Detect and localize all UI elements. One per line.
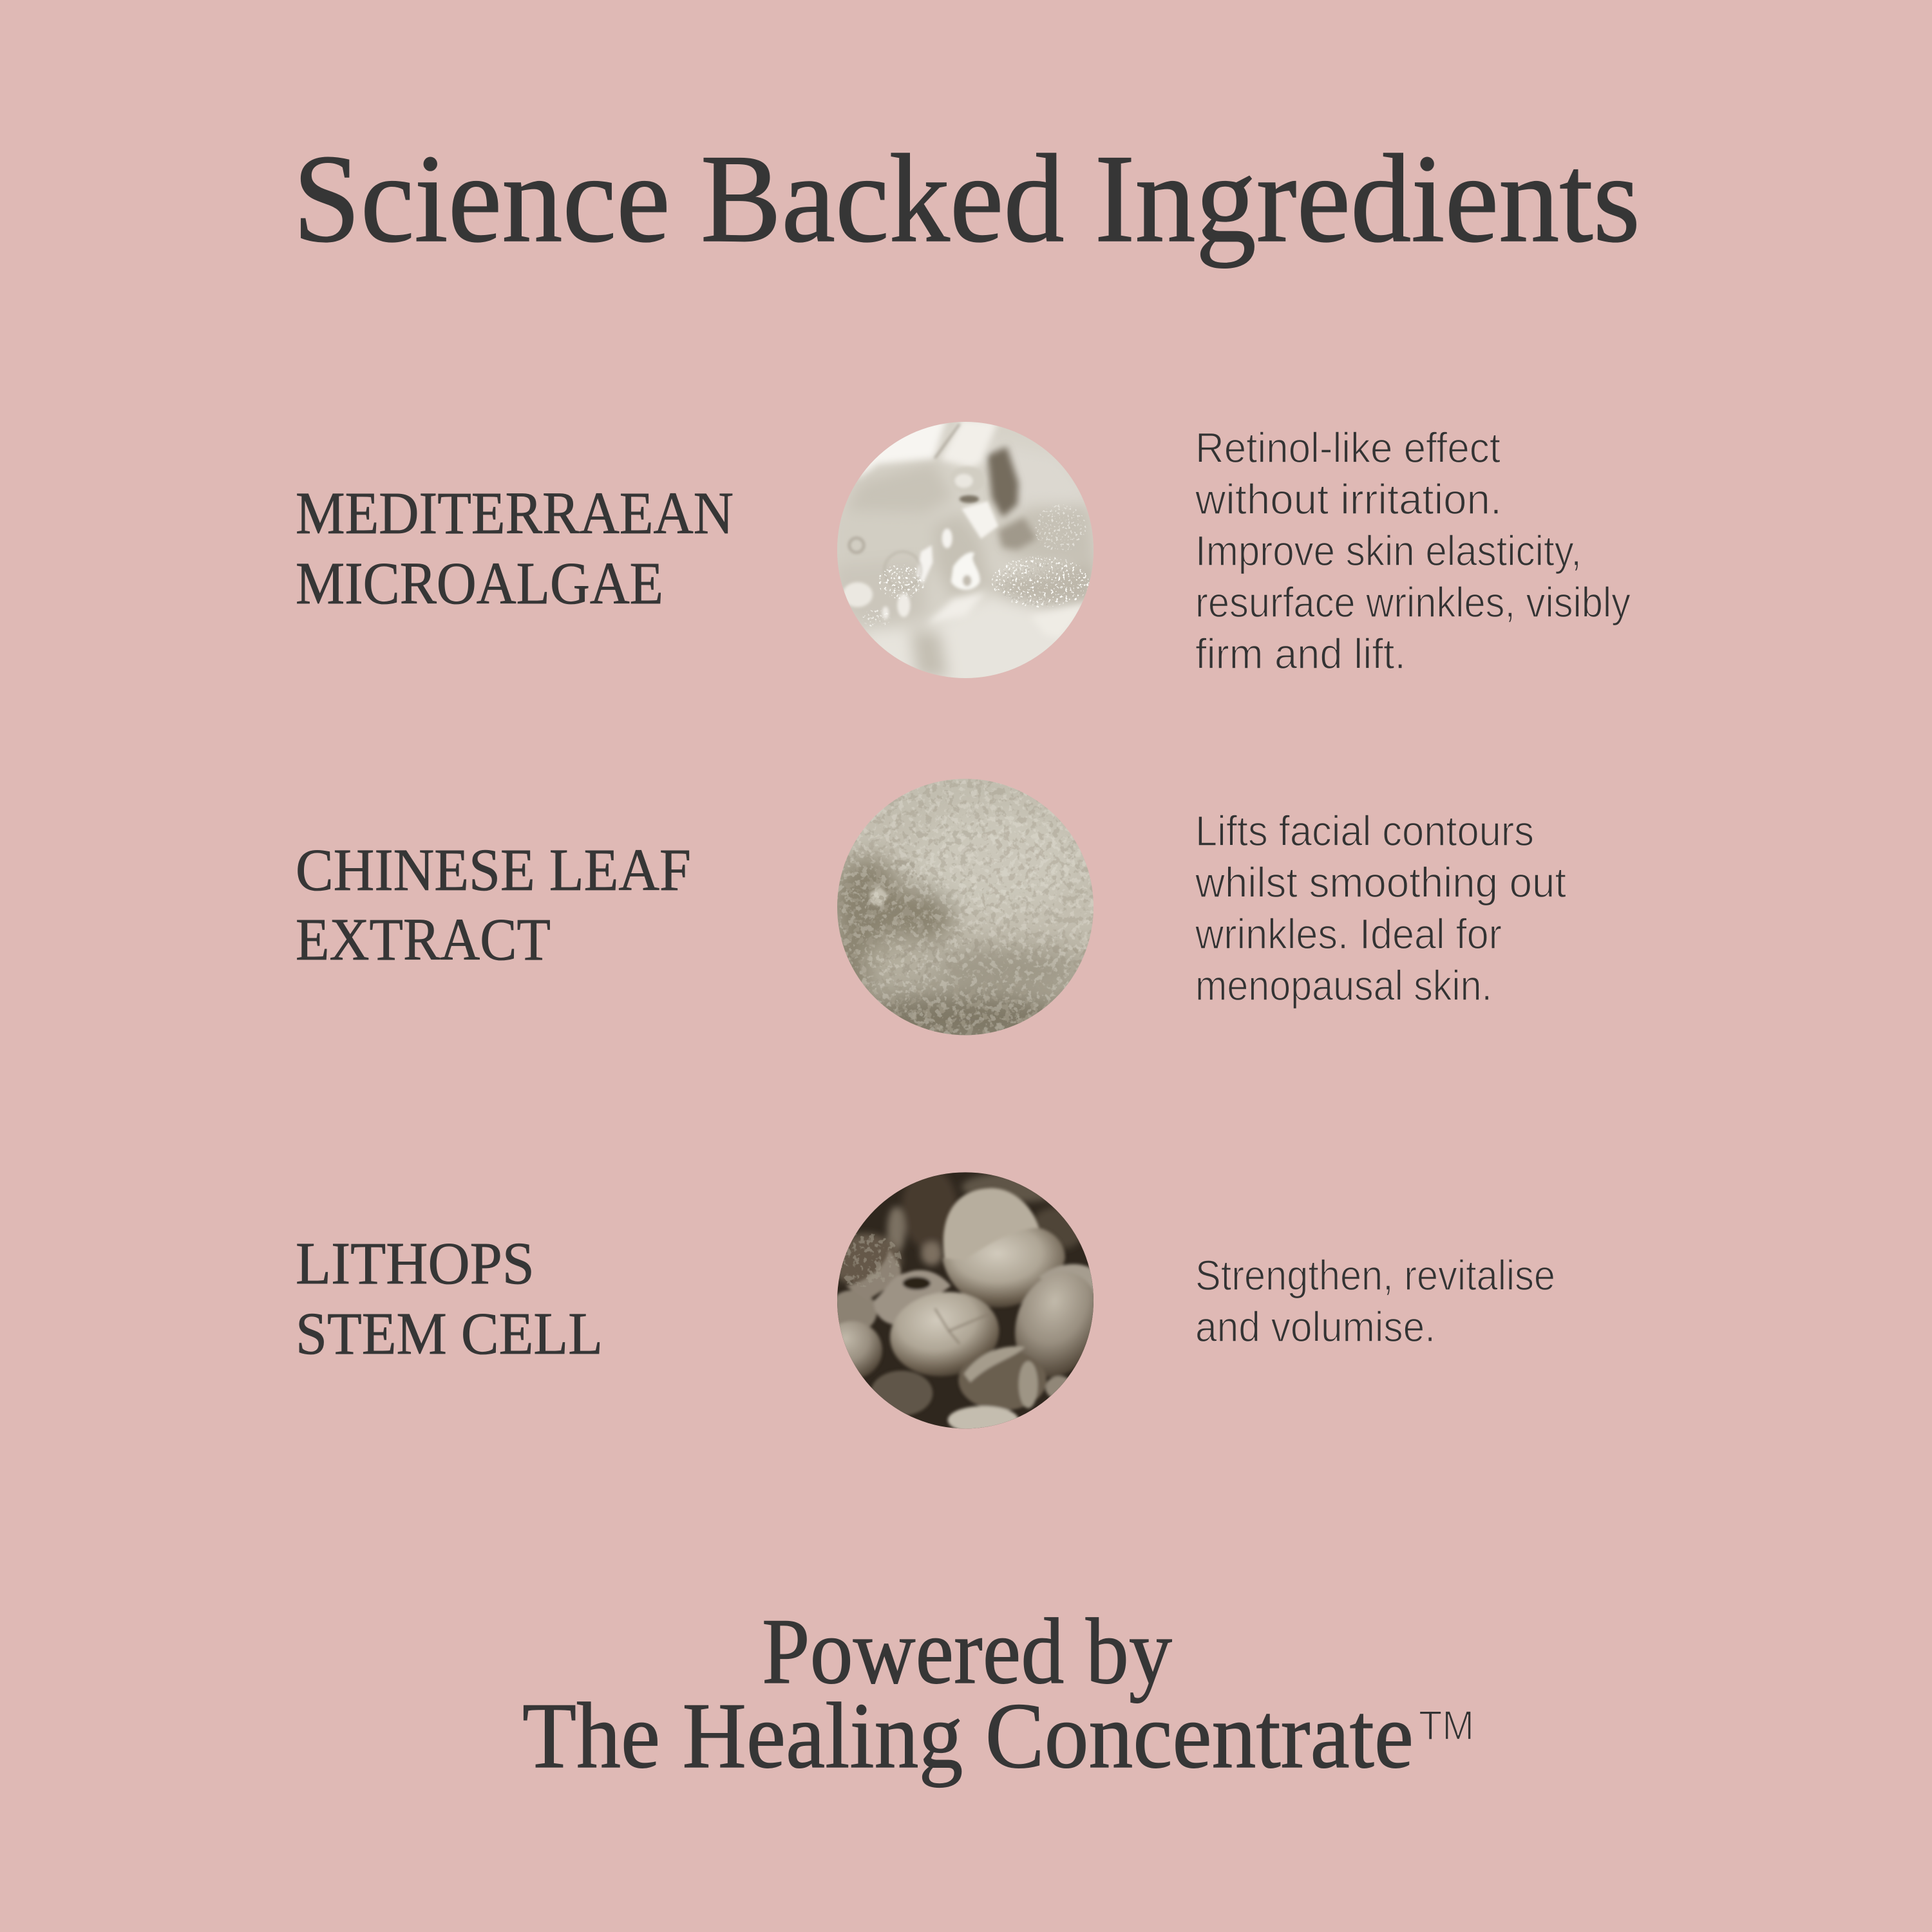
description: Mediterraean Microalgae: resurface wrinkles, visibly [1195, 578, 1631, 626]
panel: Chinese Leaf Extract [296, 766, 1566, 1043]
panel: Mediterraean Microalgae [296, 412, 1631, 691]
heading: Chinese Leaf Extract [296, 837, 691, 973]
description: Mediterraean Microalgae: Improve skin elasticity, [1195, 527, 1582, 574]
description: Mediterraean Microalgae: Retinol-like effect [1195, 424, 1501, 471]
footer text: TM [1419, 1702, 1474, 1748]
footer text: Powered by [762, 1599, 1172, 1703]
heading: Mediterraean Microalgae: MEDITERRAEAN [296, 480, 734, 547]
description: Chinese Leaf Extract: menopausal skin. [1195, 961, 1492, 1009]
heading: Lithops Stem Cell [296, 1231, 603, 1367]
description: Mediterraean Microalgae: without irritation. [1195, 475, 1502, 523]
photo: powder [837, 779, 1094, 1036]
heading: Chinese Leaf Extract: EXTRACT [296, 907, 551, 973]
heading: Lithops Stem Cell: STEM CELL [296, 1301, 603, 1367]
description: Lithops Stem Cell: Strengthen, revitalise [1195, 1251, 1555, 1299]
description: Chinese Leaf Extract [1195, 807, 1566, 1009]
heading: Mediterraean Microalgae: MICROALGAE [296, 551, 663, 617]
heading: Chinese Leaf Extract: CHINESE LEAF [296, 837, 691, 904]
description: Mediterraean Microalgae [1195, 424, 1631, 677]
heading: Mediterraean Microalgae [296, 480, 734, 617]
description: Chinese Leaf Extract: Lifts facial contours [1195, 807, 1534, 855]
description: Mediterraean Microalgae: firm and lift. [1195, 630, 1406, 677]
heading: Lithops Stem Cell: LITHOPS [296, 1231, 535, 1297]
title: Science Backed Ingredients [293, 129, 1640, 269]
photo: lithops stones [822, 1159, 1113, 1436]
footer text [522, 1599, 1474, 1788]
panel: Lithops Stem Cell [296, 1159, 1555, 1436]
footer text: The Healing Concentrate [522, 1683, 1414, 1788]
description: Lithops Stem Cell [1195, 1251, 1555, 1350]
description: Chinese Leaf Extract: wrinkles. Ideal for [1195, 910, 1502, 958]
photo: liquid serum with bubbles [837, 422, 1094, 678]
description: Chinese Leaf Extract: whilst smoothing out [1195, 858, 1566, 906]
description: Lithops Stem Cell: and volumise. [1195, 1303, 1435, 1350]
